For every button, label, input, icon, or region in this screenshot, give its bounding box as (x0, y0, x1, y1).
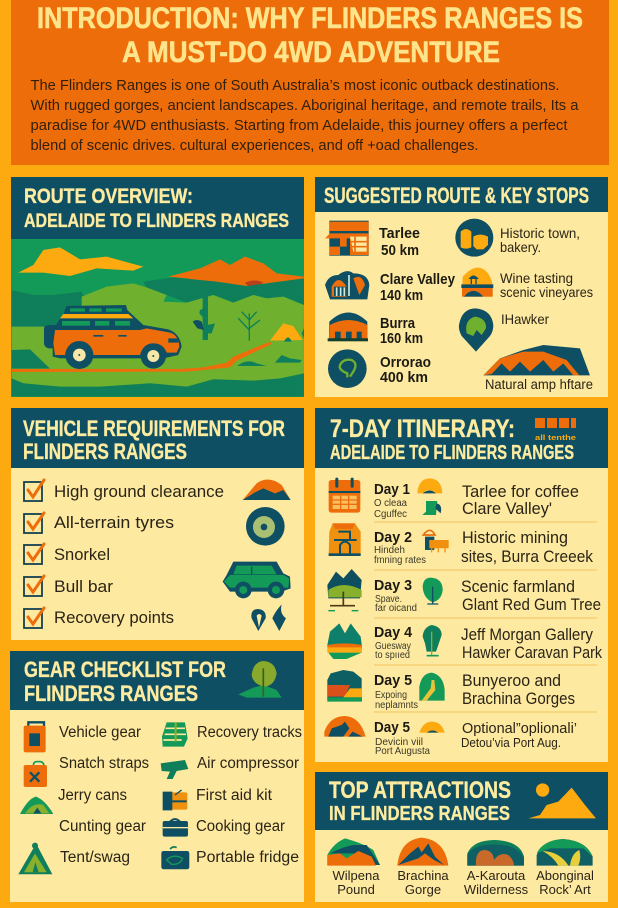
heading: top attractions (329, 777, 511, 825)
icon: coffee cup (422, 501, 441, 515)
stop labels: right column: scenic vineyares (500, 284, 593, 300)
stop labels: left column: 50 km (381, 242, 419, 259)
icon: arch path (419, 673, 445, 701)
stop labels: right column: bakery. (500, 239, 541, 255)
icon: Orrorao (328, 349, 367, 388)
gear icons (18, 661, 282, 874)
gear list text: right column: Cooking gear (196, 818, 285, 835)
requirements checklist text: Bull bar (54, 577, 113, 596)
attraction labels: Gorge (405, 882, 441, 897)
intro text block: blend of scenic drives. cultural experiences, and off +oad challenges. (30, 137, 478, 154)
attraction labels: Abonginal (536, 868, 594, 883)
tree: bare (238, 312, 260, 341)
icon: tent (18, 843, 52, 874)
itinerary small notes: far oicand (375, 603, 417, 614)
stop labels: right column: Natural amp hftare (485, 377, 593, 392)
itinerary icons: lower (324, 585, 445, 737)
icon: Hawker pin (459, 308, 493, 352)
icon: Aboriginal rock art (537, 839, 593, 866)
title: A MUST-DO 4WD ADVENTURE (122, 36, 500, 69)
stop labels: left column: 140 km (380, 287, 423, 304)
icon: check boxes (24, 480, 44, 628)
icon: sun and mountain (528, 783, 596, 818)
dividers (374, 522, 597, 712)
tent on hill (270, 323, 303, 342)
attraction labels: Rock’ Art (539, 882, 591, 897)
itinerary small notes: Expoing (375, 690, 407, 701)
itinerary descriptions: Glant Red Gum Tree (462, 596, 601, 614)
panel: top attractions (315, 772, 608, 902)
stop labels: left column: Tarlee (379, 225, 420, 242)
icon: tree in heading (238, 661, 282, 698)
stop labels: right column (485, 225, 593, 392)
icon: cooking gear (163, 819, 188, 837)
icon: sun hat (417, 478, 442, 493)
heading: gear checklist (24, 657, 226, 706)
itinerary small notes: Port Augusta (375, 745, 430, 757)
gear list text: left column: Snatch straps (59, 755, 149, 772)
icon: gorge day 5 (327, 670, 362, 702)
tree: cactus (193, 295, 215, 340)
panel: introduction (11, 0, 609, 165)
icon: forest tree base (328, 585, 362, 611)
itinerary descriptions: Clare Valley' (462, 500, 552, 518)
itinerary descriptions: Jeff Morgan Gallery (461, 626, 594, 644)
icon: air compressor (161, 760, 188, 779)
panel: 7-day itinerary (315, 408, 608, 762)
itinerary small notes: Hindeh (374, 545, 405, 556)
itinerary small notes: Spave. (375, 594, 402, 605)
itinerary descriptions: Historic mining (462, 529, 568, 547)
icon: sunset hill (324, 716, 366, 737)
title (37, 2, 583, 69)
icon: mining site (423, 530, 449, 552)
requirements checklist text (54, 482, 224, 627)
stop icons (325, 219, 590, 388)
itinerary day labels: Day 4 (374, 624, 413, 641)
gear list text: left column: Jerry cans (58, 787, 127, 804)
itinerary day labels (374, 481, 413, 736)
icon: Wilpena Pound (327, 838, 380, 866)
itinerary descriptions: Bunyeroo and (462, 672, 561, 690)
gear list text: right column (196, 724, 302, 866)
itinerary day labels: Day 3 (374, 577, 412, 594)
requirements checklist text: Snorkel (54, 545, 110, 564)
icon: natural amphitheatre (483, 345, 590, 375)
icon: mini schedule in heading: all tenthe (535, 433, 576, 442)
icon: green tree trunk (423, 587, 443, 604)
itinerary descriptions (461, 483, 603, 750)
attraction icons (327, 783, 596, 866)
stop labels: left column: Clare Valley (380, 271, 456, 288)
attraction labels: Brachina (397, 868, 449, 883)
itinerary descriptions: Scenic farmland (461, 578, 575, 596)
itinerary day labels: Day 1 (374, 481, 410, 498)
heading: route overview: ROUTE OVERVIEW: (24, 185, 193, 208)
gear list text: right column: Portable fridge (196, 849, 299, 866)
itinerary descriptions: sites, Burra Creeek (461, 548, 594, 566)
stop labels: left column (379, 225, 456, 386)
icon: vehicle gear can (24, 722, 46, 752)
icon: vineyards (462, 268, 493, 297)
requirements checklist text: High ground clearance (54, 482, 224, 501)
itinerary day labels: Day 2 (374, 529, 412, 546)
intro text block: paradise for 4WD enthusiasts. Starting from Adelaide, this journey offers a perfect (30, 117, 568, 134)
panel: vehicle requirements (11, 408, 304, 640)
icon: ground clearance mound (243, 480, 291, 500)
gear list text: left column: Tent/swag (60, 849, 130, 866)
itinerary small notes: O cleaa (374, 498, 407, 509)
requirements checklist text: Recovery points (54, 608, 174, 627)
itinerary descriptions: Optional”oplionali’ (462, 721, 577, 737)
attraction labels: Wilpena (333, 868, 380, 883)
gear list text: right column: First aid kit (196, 787, 273, 804)
icon: Karouta Wilderness (467, 840, 524, 866)
itinerary small notes (374, 498, 430, 757)
itinerary small notes: to spııed (375, 650, 410, 661)
icon: Tarlee town (325, 221, 369, 256)
icon: sun dome (419, 722, 445, 733)
heading: itinerary: 7-DAY ITINERARY: (330, 415, 515, 443)
intro text block: With rugged gorges, ancient landscapes. Aboriginal heritage, and remote trails, Its a (30, 97, 579, 114)
panel: route overview (11, 177, 304, 397)
vehicle: orange 4WD (44, 305, 182, 369)
attraction labels: Wilderness (464, 882, 529, 897)
icon: calendar (329, 478, 360, 513)
icon: leaf tree (423, 625, 442, 656)
gear list text: left column: Cunting gear (59, 818, 146, 835)
stop labels: right column: Historic town, (500, 225, 580, 241)
stop labels: left column: Burra (380, 315, 416, 332)
gear list text: right column: Air compressor (197, 755, 299, 772)
itinerary small notes: Devicin viil (375, 736, 423, 748)
attraction labels: A-Karouta (467, 868, 526, 883)
icon: first aid kit (163, 790, 187, 810)
gear list text: left column (58, 724, 149, 866)
icon: jerry can dome (20, 797, 53, 814)
panel: gear checklist (10, 651, 304, 902)
attraction labels (333, 868, 594, 897)
gear list text: right column: Recovery tracks (197, 724, 302, 741)
icon: historic building (329, 523, 361, 556)
itinerary descriptions: Detou’via Port Aug. (461, 735, 561, 750)
heading: vehicle requirements: VEHICLE REQUIREMENTS FOR (23, 416, 285, 441)
icon: bakery (455, 219, 493, 257)
itinerary day labels: Day 5 (374, 719, 410, 736)
landscape illustration (12, 247, 304, 397)
icon: mini schedule in heading (535, 418, 576, 442)
icon: Brachina Gorge (397, 838, 448, 866)
icon: portable fridge (161, 847, 189, 869)
icon: green 4WD (223, 562, 291, 598)
icon: mountains day 4 (327, 623, 362, 659)
itinerary small notes: Cguffec (374, 509, 407, 520)
itinerary descriptions: Brachina Gorges (462, 690, 575, 708)
panel: suggested route and key stops (315, 177, 608, 397)
icon: forest tree (327, 569, 362, 598)
icon: Clare Valley (325, 271, 369, 299)
heading: top attractions: TOP ATTRACTIONS (329, 777, 511, 804)
itinerary day labels: Day 5 (374, 672, 412, 689)
stop labels: left column: Orrorao (380, 354, 431, 371)
icon: Burra (328, 312, 368, 341)
intro text block (30, 77, 579, 154)
attraction labels: Pound (337, 882, 375, 897)
heading: vehicle requirements: FLINDERS RANGES (23, 439, 187, 464)
icon: recovery tracks (162, 722, 188, 747)
icon: recovery points (251, 604, 286, 631)
heading: gear checklist: GEAR CHECKLIST FOR (24, 657, 226, 682)
heading: route overview: ADELAIDE TO FLINDERS RANGES (24, 211, 289, 232)
vehicle icons (223, 480, 291, 631)
requirements checklist text: All-terrain tyres (54, 513, 174, 532)
stop labels: left column: 400 km (380, 369, 428, 386)
heading: vehicle requirements (23, 416, 285, 464)
itinerary small notes: neplamnts (375, 700, 418, 711)
icon: green tree (423, 578, 443, 602)
gear list text: left column: Vehicle gear (59, 724, 141, 741)
heading: route overview (24, 185, 289, 232)
itinerary small notes: fmning rates (374, 555, 426, 566)
heading: gear checklist: FLINDERS RANGES (24, 681, 198, 706)
intro text block: The Flinders Ranges is one of South Australia’s most iconic outback destinations. (30, 77, 560, 94)
heading: itinerary (330, 415, 574, 464)
stop labels: right column: IHawker (501, 311, 549, 327)
stop labels: left column: 160 km (380, 330, 423, 347)
icon: snatch strap bag (24, 762, 47, 787)
icon: tyre (246, 507, 285, 546)
itinerary icons: upper (327, 478, 449, 602)
heading: top attractions: IN FLINDERS RANGES (329, 803, 510, 825)
itinerary descriptions: Tarlee for coffee (462, 483, 579, 501)
stop labels: right column: Wine tasting (500, 270, 573, 286)
itinerary small notes: Guesway (375, 641, 411, 652)
